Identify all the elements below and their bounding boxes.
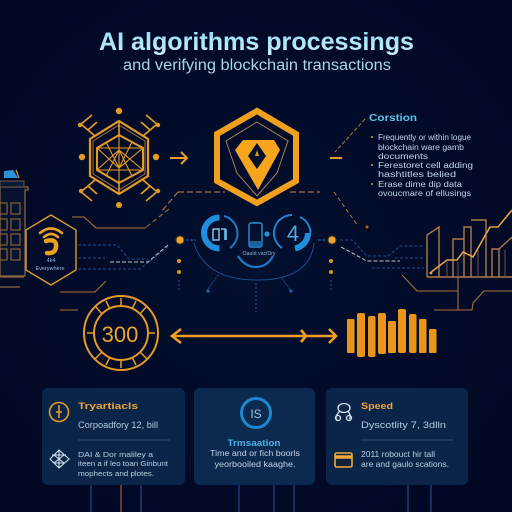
icon: network diamond [50, 450, 69, 468]
bullet list: documents [378, 152, 428, 161]
bullet list: blockchain ware gamb [378, 143, 465, 152]
panel: transaction: yeorbooiled kaaghe. [214, 460, 296, 469]
title: and verifying blockchain transactions [123, 57, 391, 74]
ring: block [204, 216, 237, 248]
line and bar chart [427, 210, 512, 277]
small hexagon: wifi node: Everywhere [36, 266, 64, 272]
central blockchain node group: Oauld vaciDry [242, 251, 276, 257]
icon: coin ring: IS [250, 407, 262, 421]
panel: speed: Speed [361, 401, 393, 412]
bullet list [371, 133, 473, 198]
bullet list: ovoucmare of ellusings [378, 189, 471, 198]
icon: clock [50, 402, 68, 422]
icon: signal [40, 228, 62, 253]
bullet list: Erase dime dip data [378, 180, 463, 189]
panel: throughput: Tryartiacls [78, 401, 138, 412]
icon: central gem hexagon [217, 111, 296, 203]
title [99, 28, 414, 74]
corner label: Corstion [369, 113, 417, 124]
panel: throughput: iteen a if leo toan Ginbunt [78, 459, 169, 468]
ring: four: 4 [287, 221, 299, 246]
connector circuit lines [60, 192, 512, 312]
orange bar cluster [347, 309, 436, 357]
panel: speed: Dyscotlity 7, 3dlln [361, 420, 446, 430]
arrow: network to block [170, 152, 187, 164]
bullet list: hashtitles belied [378, 170, 456, 179]
panel: throughput [42, 388, 185, 485]
block counter 300 [84, 296, 158, 370]
panel: transaction: Time and or fich boorls [210, 449, 300, 458]
title: AI algorithms processings [99, 28, 414, 56]
panel: speed [326, 388, 468, 485]
panel: throughput: DAI & Dor maliley a [78, 450, 154, 459]
panel: transaction: Trmsaation [228, 438, 280, 448]
icon: phone [249, 223, 270, 247]
timeline nodes [176, 236, 336, 274]
small hexagon: wifi node [26, 215, 76, 285]
icon: building [0, 170, 28, 287]
small hexagon: wifi node: 4k4 [47, 258, 55, 264]
bullet list: Ferestoret cell adding [378, 161, 473, 170]
icon: stethoscope [336, 404, 352, 420]
icon: AI network hexagon [78, 108, 160, 208]
panel: transaction [194, 388, 315, 485]
panel: throughput: mophects and plotes. [78, 469, 154, 478]
panel: speed: are and gaulo scations. [361, 460, 449, 469]
panel: throughput: Corpoadfory 12, bill [78, 420, 158, 430]
icon: wallet [335, 453, 352, 467]
central blockchain node group [194, 215, 314, 293]
bullet list: Frequently or within logue [378, 133, 472, 142]
panel: speed: 2011 robouct hir tall [361, 450, 435, 459]
double arrow [172, 329, 336, 343]
corner label [330, 113, 417, 228]
card stems [91, 485, 431, 512]
block counter 300: 300 [102, 322, 138, 347]
